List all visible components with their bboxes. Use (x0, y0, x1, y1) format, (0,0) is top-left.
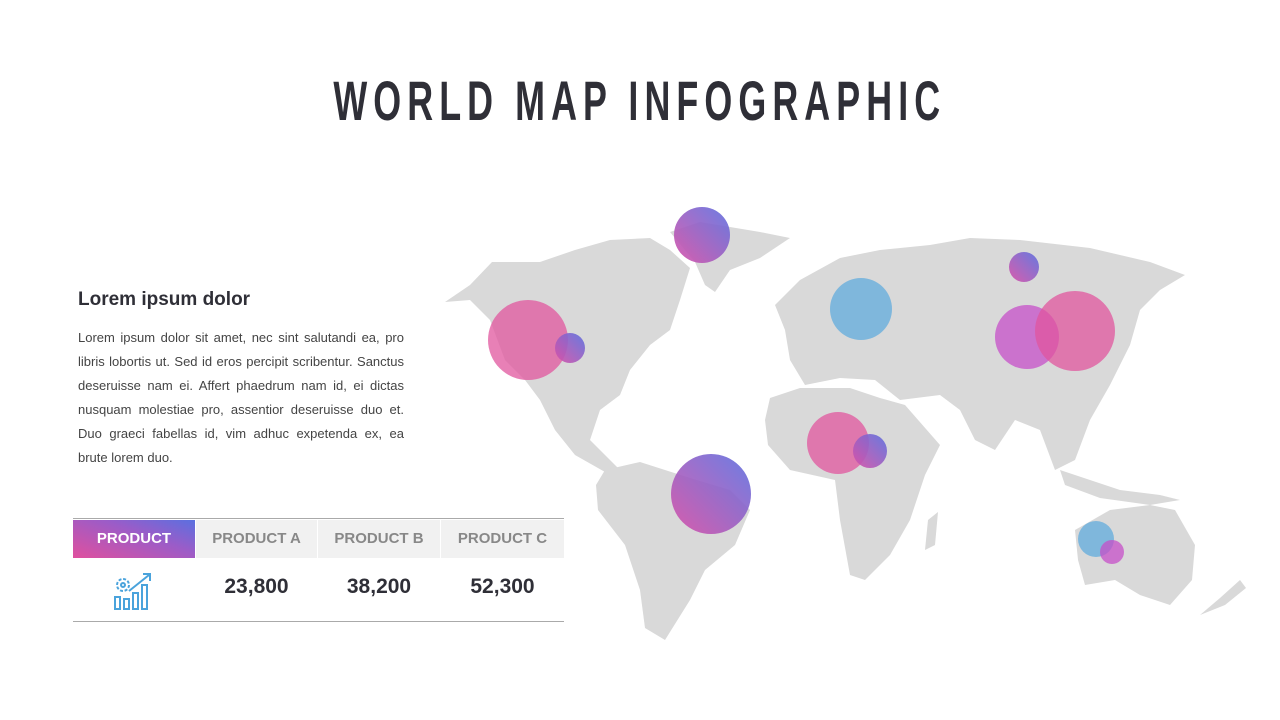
island: new zealand (1200, 580, 1246, 615)
bubble south america (671, 454, 751, 534)
header: product c: PRODUCT C (458, 530, 547, 547)
bubble africa small (853, 434, 887, 468)
title: WORLD MAP INFOGRAPHIC (334, 69, 946, 132)
bubble north america (488, 300, 568, 380)
table (73, 518, 564, 622)
header: product (73, 520, 195, 558)
continent: australia (1075, 505, 1195, 605)
islands: indonesia (1060, 470, 1180, 505)
header: product c (441, 520, 564, 558)
value c: 52,300 (470, 575, 535, 598)
continent: south america (596, 462, 750, 640)
continent: africa (765, 388, 940, 580)
continent: europe asia (775, 238, 1185, 470)
header: product b: PRODUCT B (334, 530, 424, 547)
header: product b (318, 520, 440, 558)
value a: 23,800 (224, 575, 289, 598)
bubble north america small (555, 333, 585, 363)
bubble asia violet (995, 305, 1059, 369)
island: madagascar (925, 512, 938, 550)
text block: Lorem ipsum dolor sit amet, nec sint salutandi ea, pro libris lobortis ut. Sed id eros percipit scribentur. Sanctus deseruisse nam ei. Affert phaedrum nam id, ei dictas nusquam molestiae pro, assentior deseruisse duo et. Duo graeci fabellas id, vim adhuc expetenda ex, ea brute lorem duo. (78, 330, 404, 465)
bubble asia pink (1035, 291, 1115, 371)
bubble africa (807, 412, 869, 474)
header: product a: PRODUCT A (212, 530, 301, 547)
continent: greenland (670, 222, 790, 292)
bubble australia violet (1100, 540, 1124, 564)
heading: Lorem ipsum dolor (78, 289, 250, 310)
continent: north america (445, 238, 690, 472)
bubble greenland (674, 207, 730, 263)
bubble europe (830, 278, 892, 340)
bubbles (488, 207, 1124, 564)
value b: 38,200 (347, 575, 411, 598)
header: product: PRODUCT (97, 530, 171, 547)
icon: gear chart (114, 573, 151, 610)
bubble australia blue (1078, 521, 1114, 557)
bubble russia (1009, 252, 1039, 282)
header: product a (196, 520, 317, 558)
